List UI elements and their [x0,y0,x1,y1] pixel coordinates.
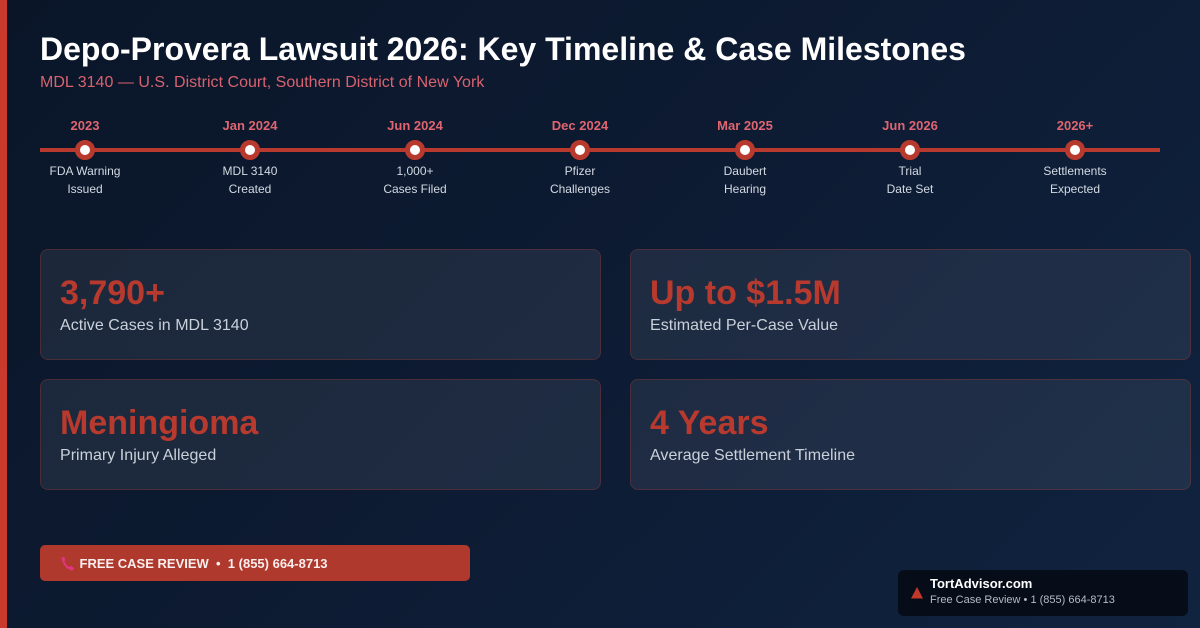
milestone: Jun 2024 [383,118,447,196]
timeline: Trial [899,164,921,178]
milestone: Jan 2024 [222,118,278,196]
button text: FREE CASE REVIEW • 1 (855) 664-8713 [80,556,328,570]
panel: settlement timeline: Average Settlement Timeline [650,447,855,464]
panel: active cases: Active Cases in MDL 3140 [60,317,249,334]
timeline line [40,148,1160,152]
icon: phone [62,556,74,570]
milestone: 2023 [50,118,120,196]
panel: active cases: 3,790+ [60,274,165,312]
timeline: Dec 2024 [552,118,608,133]
timeline: 1,000+ [396,164,434,178]
panel: per-case value: Estimated Per-Case Value [650,317,838,334]
milestone: 2026+ [1043,118,1107,196]
panel: settlement timeline: 4 Years [650,404,769,442]
timeline: Issued [67,182,103,196]
timeline: Mar 2025 [717,118,773,133]
timeline: Hearing [724,182,766,196]
timeline: Jan 2024 [223,118,277,133]
panel: settlement timeline [630,379,1191,490]
timeline: Expected [1050,182,1100,196]
timeline: Created [229,182,271,196]
panel: primary injury: Meningioma [60,404,258,442]
brand badge [898,570,1188,616]
timeline: Pfizer [565,164,595,178]
panel: active cases [40,249,601,360]
timeline [40,118,1160,196]
panel: per-case value: Up to $1.5M [650,274,841,312]
timeline: 2023 [71,118,99,133]
timeline: Cases Filed [383,182,447,196]
milestone: Jun 2026 [882,118,938,196]
panel: primary injury: Primary Injury Alleged [60,447,216,464]
timeline: Date Set [887,182,933,196]
panel: per-case value [630,249,1191,360]
subtitle: MDL 3140 — U.S. District Court, Southern District of New York [40,74,484,91]
timeline: Challenges [550,182,610,196]
panel: primary injury [40,379,601,490]
timeline: Daubert [724,164,766,178]
timeline: 2026+ [1057,118,1093,133]
brand contact: Free Case Review • 1 (855) 664-8713 [930,594,1115,606]
brand name: TortAdvisor.com [930,576,1032,591]
call to action button [40,545,470,581]
timeline: MDL 3140 [223,164,277,178]
timeline: Settlements [1043,164,1107,178]
milestone: Dec 2024 [550,118,610,196]
milestone: Mar 2025 [717,118,773,196]
title: Depo-Provera Lawsuit 2026: Key Timeline & Case Milestones [40,31,966,67]
accent bar [0,0,7,628]
timeline: Jun 2024 [387,118,443,133]
icon: triangle [911,587,923,598]
timeline: FDA Warning [50,164,120,178]
timeline: Jun 2026 [882,118,938,133]
